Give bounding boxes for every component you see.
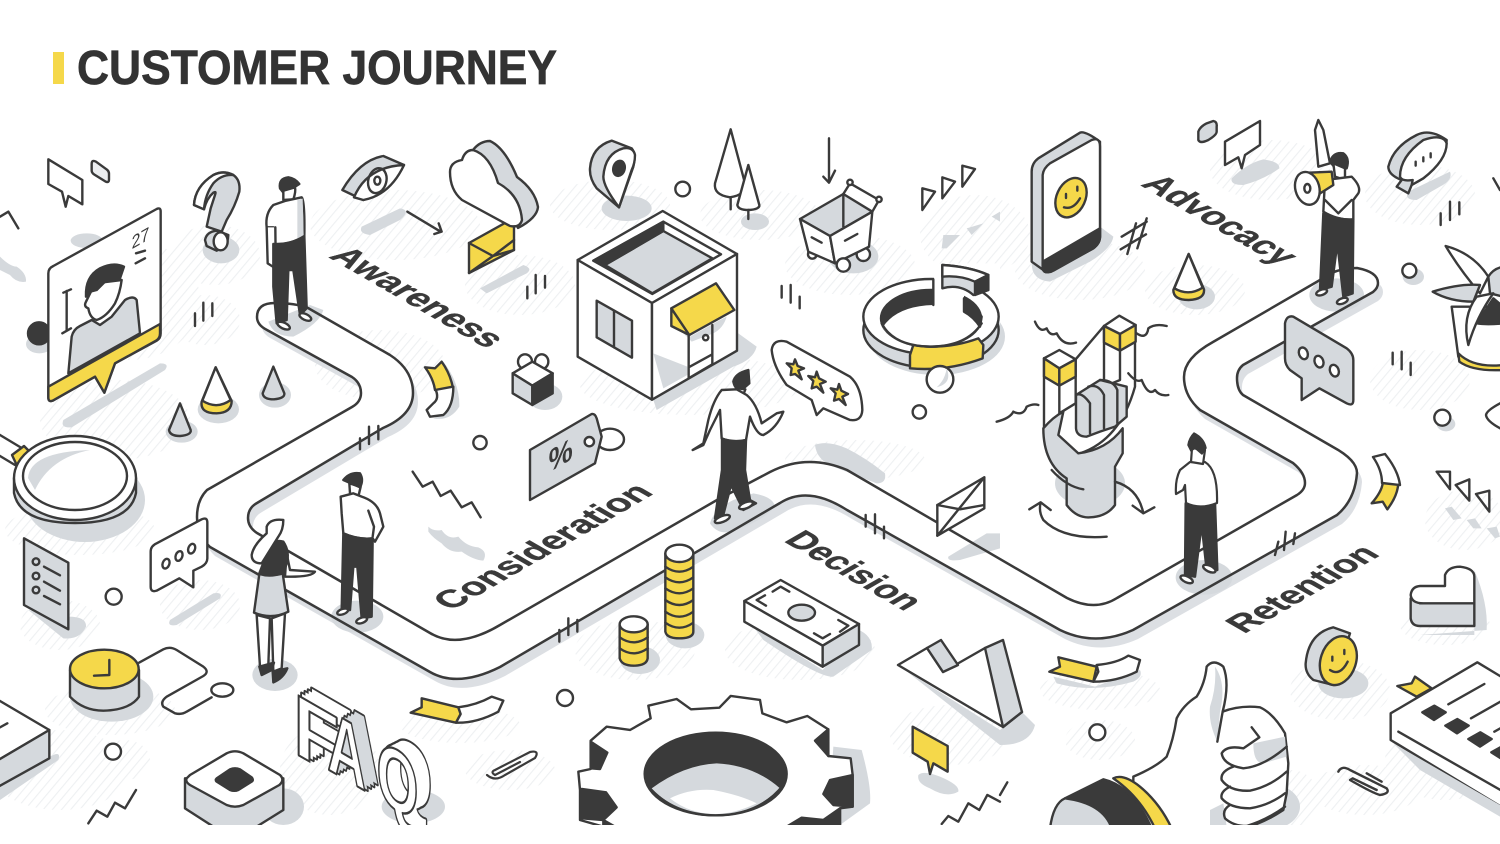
icon: yellow envelope [469,218,514,273]
review bubble with stars [772,341,862,420]
icon: FAQ letters: Q [390,714,432,834]
icon: oval speech bubble [1388,133,1451,200]
icon: potted plant [1433,246,1500,370]
triangles [922,166,975,210]
shadows near profile card [0,233,167,427]
small circles [1402,264,1455,431]
icon: thumbs up [1133,662,1300,830]
icon: FAQ letters: F [307,669,353,791]
decorative dashes [195,303,212,326]
icon: checklist [24,538,86,639]
icon: calendar block [1391,662,1500,817]
icon: FAQ letters: F [307,669,353,791]
squiggles [997,322,1168,422]
triangles [1437,472,1500,538]
icon: banknote [744,580,872,677]
icon: hash [1121,218,1147,254]
chevron mark [1493,178,1500,190]
icon: FAQ letters: A [327,691,366,810]
icon: FAQ letters: Q [383,717,425,838]
zigzag [942,795,1000,824]
zigzag tail [1000,782,1007,795]
road tick [559,514,884,642]
icon: FAQ letters: F [300,672,346,794]
icon: trees [715,129,769,230]
icon: cuff [1050,777,1172,828]
label: Decision: Decision [776,525,932,616]
icon: heart box [1411,567,1487,635]
ribbon piece [425,362,459,419]
icon: FAQ letters: Q [380,719,422,839]
icon: dark circle [28,322,50,344]
icon: smiley coin [1306,627,1368,698]
icon: block bottom left [0,700,59,800]
title: CUSTOMER JOURNEY [77,42,557,95]
small circle [675,182,690,196]
icon: FAQ letters: A [340,684,379,803]
icon: FAQ letters: Q [383,717,425,838]
icon: small rounded tile [92,161,109,182]
cone [1173,254,1215,309]
icon: FAQ letters: A [333,688,372,807]
person: thinking man upper body [1176,433,1217,506]
icon: FAQ letters: A [330,690,369,809]
arrow down [823,138,835,183]
small shadows [942,212,1000,248]
person: man at consideration [336,473,383,625]
speech bubble with dots [151,519,221,625]
squiggle shadow [428,527,485,561]
icon: small speech bubble outline [48,159,82,207]
icon: smartphone [1032,132,1113,282]
small circle [473,436,487,449]
person: walking man [693,370,783,520]
icon: gear [578,696,870,827]
icon: paper plane [898,640,1035,745]
icon: price tag [530,414,624,500]
icon: paperclip [1338,768,1388,795]
icon: FAQ letters: A [337,686,375,805]
road tick [1275,532,1295,555]
road surface [197,268,1378,679]
small circle [105,744,121,760]
small tile [1198,121,1217,142]
small circle [106,589,122,605]
icon: FAQ letters: F [294,675,340,798]
icon: store building [578,211,757,410]
icon: FAQ letters: Q [387,715,428,836]
icon: price tag: % [549,431,573,480]
icon: FAQ letters: F [297,674,343,796]
icon: speech bubble gray [1285,316,1353,404]
person: man with megaphone [1291,120,1359,305]
zigzag [413,472,481,517]
icon: FAQ letters: Q [390,714,432,834]
small circle [557,690,573,706]
road [197,268,1378,679]
icon: coin stacks [620,545,704,674]
icon: envelope outline [937,477,984,536]
chevron mark [0,212,18,228]
ribbon piece [411,697,503,723]
icon: FAQ letters: A [333,688,372,807]
icon: shopping cart [800,180,882,273]
icon: magnet hand [1043,316,1136,517]
icon: FAQ letters: A [330,690,369,809]
ribbon upper white part [1373,454,1400,485]
icon: FAQ letters: Q [377,720,418,841]
person: woman [252,520,315,691]
road shadow [202,277,1383,688]
icon: yellow note [913,727,958,794]
icon: ring chart [863,263,1005,393]
icon: FAQ letters: Q [387,715,428,836]
icon: FAQ letters: A [337,686,375,805]
icon: chip box [185,751,304,827]
arrow [407,212,442,234]
white footer band [0,825,1500,844]
person: thinking man legs [1179,502,1217,585]
panel: profile card [48,208,161,401]
icon: gift box [513,354,562,410]
icon: FAQ letters: F [304,670,350,793]
small circle [1089,724,1105,740]
paperclip small [487,752,537,778]
icon: cloud [450,141,538,228]
ribbon piece right [1372,482,1398,509]
label: Consideration: Consideration [424,478,661,615]
label: Awareness: Awareness [321,241,514,353]
small circle [913,405,926,419]
icon: FAQ letters: F [300,672,346,794]
walking man shoes [714,500,754,525]
icon: magnifier [0,432,145,542]
icon: FAQ letters: Q [380,719,422,839]
panel: profile card: 27 [132,222,149,253]
icon: clock with cord [70,648,233,722]
icon: FAQ letters: F [304,670,350,793]
zigzag [88,790,136,823]
dashes [527,275,800,308]
icon: question mark [194,172,240,263]
dashes [1393,202,1459,375]
shadows falling on the road [268,278,1364,633]
person: man standing at awareness [266,177,312,331]
rotation arrows [1029,482,1154,537]
label: Advocacy: Advocacy [1133,169,1308,270]
icon: FAQ letters: A [340,684,379,803]
cones [166,367,291,443]
icon: eye [342,156,406,235]
icon: FAQ letters [294,669,445,841]
ribbon piece center [1049,656,1141,688]
small speech bubble outline [1225,121,1279,185]
icon: FAQ letters: F [297,674,343,796]
cropped shape right [1486,402,1500,430]
icon: map pin [590,141,652,221]
road tick [360,426,378,449]
envelope shadow [480,265,529,293]
label: Retention: Retention [1217,539,1388,638]
